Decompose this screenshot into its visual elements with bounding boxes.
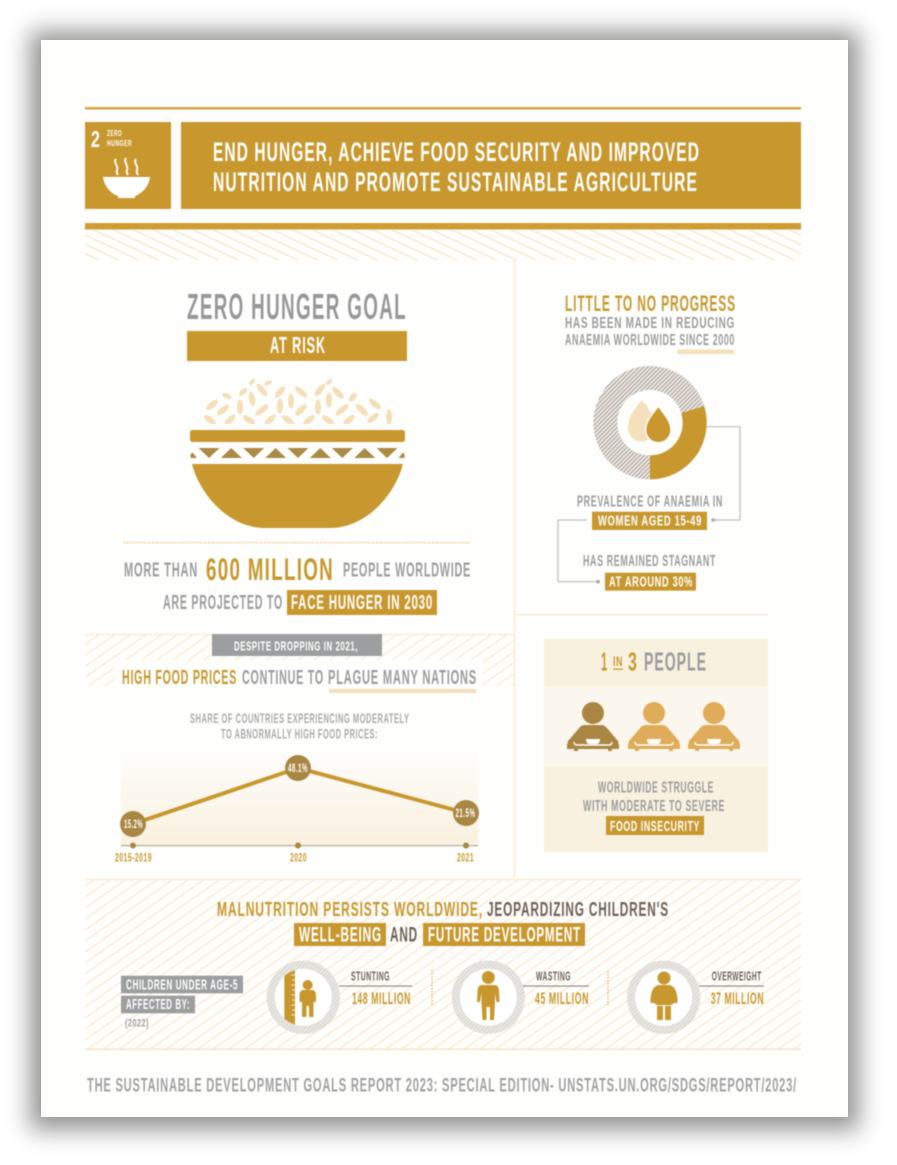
label: children under age 5: [121, 976, 243, 1030]
heading: malnutrition persists: WELL-BEING: [299, 923, 382, 947]
label: despite dropping: DESPITE DROPPING IN 2021,: [234, 638, 358, 654]
connector arrow: donut to women aged: [706, 427, 740, 520]
chart subtitle: [190, 710, 410, 742]
icon: three people at table: [567, 702, 740, 751]
heading: 1 in 3 people: 1: [601, 649, 608, 677]
heading: zero hunger goal: ZERO HUNGER GOAL: [187, 286, 407, 327]
heading: high food prices continue: [122, 666, 477, 693]
panel: zero hunger goal at risk: [124, 286, 471, 615]
heading: malnutrition persists: AND: [390, 923, 418, 947]
goal tile: SDG 2 zero hunger: HUNGER: [107, 139, 132, 148]
label: at risk: AT RISK: [270, 332, 326, 358]
header lower rule: [85, 223, 801, 230]
statement: 600 million people: [124, 551, 471, 615]
label: at around 30 percent: AT AROUND 30%: [609, 575, 693, 591]
heading: high food prices continue: HIGH FOOD PRICES: [122, 666, 237, 689]
heading: high food prices continue: PLAGUE MANY NATIONS: [328, 666, 477, 689]
panel: high food prices: [85, 634, 514, 865]
line chart: food prices: 2015-2019: [115, 851, 152, 865]
label: children under age 5: AFFECTED BY:: [126, 997, 190, 1013]
heading: 1 in 3 people: IN: [613, 653, 623, 669]
goal tile: SDG 2 zero hunger: [85, 122, 171, 209]
line chart: food prices: 2021: [457, 851, 474, 865]
connector arrow: women aged to stagnant: [558, 520, 597, 582]
heading: high food prices continue: CONTINUE TO: [242, 666, 324, 689]
label: children under age 5: (2022): [125, 1018, 149, 1030]
label: food insecurity: FOOD INSECURITY: [610, 818, 700, 835]
line chart: food prices: 21.5%: [456, 806, 476, 820]
panel: 1 in 3 people: [544, 639, 768, 852]
heading: 1 in 3 people: 3: [628, 649, 638, 677]
icon: stunted child with ruler: [267, 961, 340, 1034]
label: women aged 15-49: WOMEN AGED 15-49: [598, 514, 702, 530]
stat: wasting: 45 MILLION: [535, 989, 589, 1008]
statement: 600 million people: MORE THAN: [124, 558, 198, 582]
goal tile: SDG 2 zero hunger: ZERO: [107, 129, 122, 138]
icon: wasted child: [452, 961, 525, 1034]
text: prevalence of anaemia: PREVALENCE OF ANAEMIA IN: [577, 494, 723, 510]
stat: wasting: WASTING: [536, 970, 571, 984]
stat: overweight: [699, 970, 764, 1008]
chart subtitle: SHARE OF COUNTRIES EXPERIENCING MODERATELY: [190, 710, 410, 726]
label: at risk: [187, 331, 407, 361]
statement: 600 million people: PEOPLE WORLDWIDE: [343, 558, 471, 582]
heading: little to no progress: [565, 291, 736, 354]
line chart: food prices: [115, 753, 479, 865]
stat: stunting: 148 MILLION: [352, 989, 411, 1008]
heading: malnutrition persists: [217, 898, 669, 947]
heading: little to no progress: HAS BEEN MADE IN REDUCING: [565, 315, 735, 332]
statement: 600 million people: ARE PROJECTED TO: [163, 591, 283, 614]
heading: 1 in 3 people: PEOPLE: [644, 649, 707, 677]
label: women aged 15-49: [592, 512, 707, 530]
stat: stunting: STUNTING: [351, 970, 390, 984]
icon: blood drops: [628, 400, 671, 443]
heading: little to no progress: LITTLE TO NO PROGRESS: [565, 291, 736, 316]
stat: overweight: 37 MILLION: [711, 989, 764, 1008]
panel: anaemia: [558, 291, 740, 591]
statement: 600 million people: 600 MILLION: [206, 551, 334, 587]
label: children under age 5: CHILDREN UNDER AGE-5: [126, 977, 238, 993]
goal tile: SDG 2 zero hunger: 2: [91, 126, 101, 152]
heading: little to no progress: ANAEMIA WORLDWIDE SINCE 2000: [565, 332, 735, 349]
icon: overweight child: [627, 961, 700, 1034]
line chart: food prices: 15.2%: [124, 817, 143, 831]
line chart: food prices: 48.1%: [288, 761, 308, 775]
header title band: [181, 122, 801, 209]
label: at around 30 percent: [605, 573, 696, 591]
text: worldwide struggle: WITH MODERATE TO SEVERE: [583, 798, 725, 815]
header top rule: [85, 107, 801, 110]
panel: malnutrition: [85, 879, 801, 1050]
chart subtitle: TO ABNORMALLY HIGH FOOD PRICES:: [221, 726, 378, 742]
text: worldwide struggle: [583, 780, 725, 815]
stat: wasting: [523, 970, 589, 1008]
heading: malnutrition persists: JEOPARDIZING CHILDREN'S: [487, 898, 669, 921]
donut chart: 30 percent: [605, 378, 707, 479]
dotted divider: [124, 542, 471, 544]
label: food insecurity: [606, 816, 704, 835]
line chart: food prices: 2020: [290, 851, 307, 865]
icon: bowl of rice: [190, 378, 405, 528]
stat: stunting: [339, 970, 412, 1008]
label: despite dropping: [212, 634, 382, 656]
heading: malnutrition persists: MALNUTRITION PERSISTS WORLDWIDE,: [217, 898, 483, 921]
text: has remained stagnant: HAS REMAINED STAGNANT: [583, 553, 716, 570]
heading: malnutrition persists: FUTURE DEVELOPMENT: [428, 923, 581, 947]
heading: 1 in 3 people: [601, 649, 707, 677]
statement: 600 million people: FACE HUNGER IN 2030: [291, 591, 433, 614]
stat: overweight: OVERWEIGHT: [712, 970, 762, 984]
text: worldwide struggle: WORLDWIDE STRUGGLE: [598, 780, 714, 797]
icon: steaming bowl: [103, 158, 150, 198]
